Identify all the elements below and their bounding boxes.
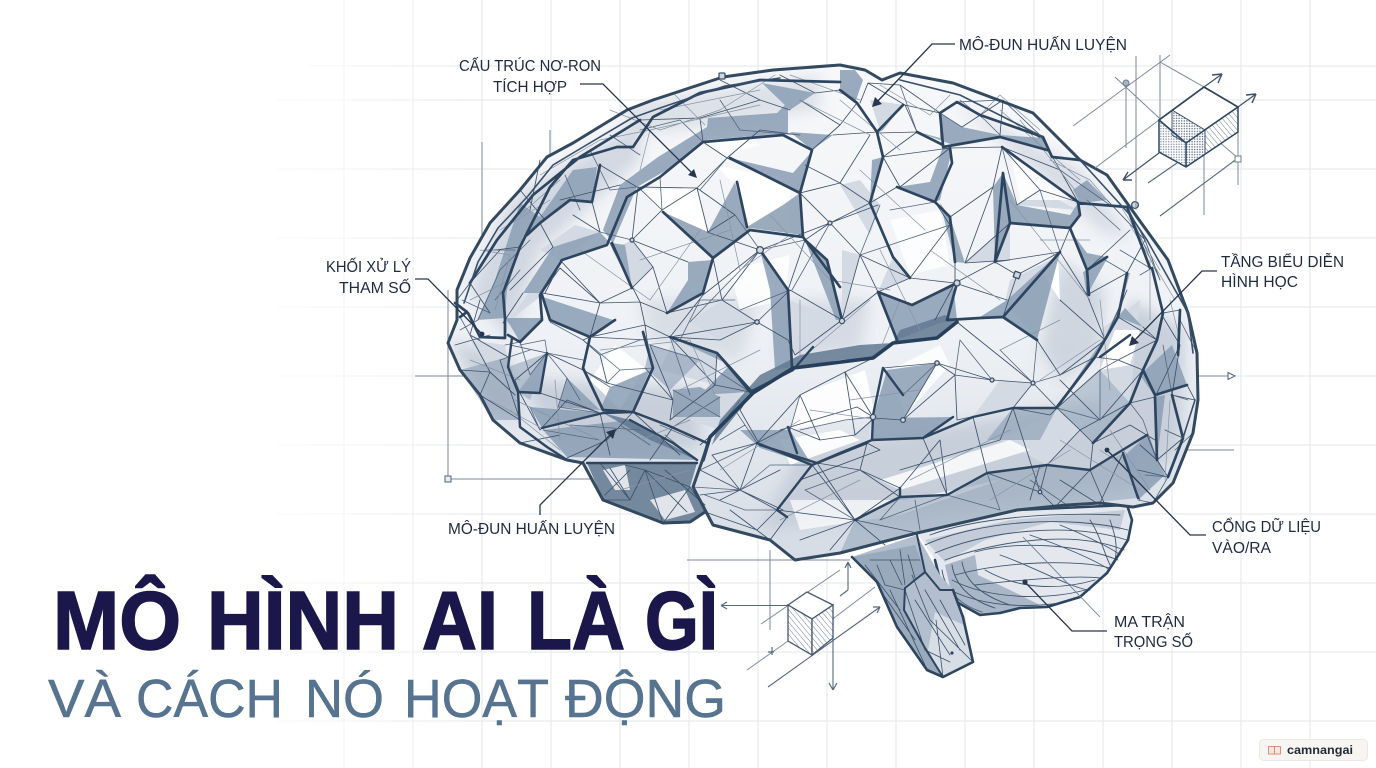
icon: top-right wireframe cube (1073, 55, 1256, 216)
label: parameter block: KHỐI XỬ LÝ (326, 256, 411, 276)
label: parameter block: THAM SỐ (339, 277, 411, 297)
mesh nodes (630, 73, 1138, 494)
title: HÌNH (207, 574, 399, 667)
white facets in underside (603, 465, 695, 520)
sylvian fissure (703, 322, 957, 460)
background grid (276, 0, 1376, 768)
title: GÌ (645, 574, 718, 667)
label: geometric representation layer (1129, 252, 1344, 346)
white highlights (590, 130, 1140, 530)
label: input output port: VÀO/RA (1212, 538, 1271, 557)
icon: book (1268, 746, 1280, 754)
dark underside (587, 315, 957, 523)
subtitle: CÁCH (136, 669, 283, 729)
label: weight matrix: MA TRẬN (1114, 612, 1185, 631)
light mesh (470, 75, 1180, 520)
label: top training module (872, 35, 1127, 107)
label: geometric representation layer: HÌNH HỌC (1221, 272, 1298, 291)
label: neural structure: TÍCH HỢP (493, 77, 567, 96)
cerebellum (917, 505, 1132, 615)
title (53, 574, 718, 667)
light facets (470, 100, 1140, 465)
watermark badge (1260, 740, 1368, 760)
label: neural structure: CẤU TRÚC NƠ-RON (459, 56, 601, 75)
label: neural structure (459, 56, 697, 178)
subtitle: HOẠT (404, 669, 549, 729)
construction lines (415, 130, 1235, 630)
watermark badge: camnangai (1287, 743, 1353, 757)
brainstem (852, 535, 973, 677)
outer contour (448, 65, 1198, 560)
label: lower training module: MÔ-ĐUN HUẤN LUYỆN (448, 519, 615, 538)
label: weight matrix (1022, 537, 1193, 651)
subtitle: NÓ (305, 669, 384, 729)
subtitle (48, 669, 726, 729)
extra mesh (460, 85, 1197, 530)
label: lower training module (448, 429, 616, 538)
label: top training module: MÔ-ĐUN HUẤN LUYỆN (959, 35, 1127, 54)
thin mesh (455, 75, 1195, 550)
label: geometric representation layer: TẦNG BIỂU DIỄN (1221, 252, 1344, 271)
title: LÀ (527, 574, 625, 667)
label: input output port: CỔNG DỮ LIỆU (1212, 516, 1321, 536)
cerebrum (448, 65, 1198, 560)
icon: bottom wireframe cube (721, 562, 880, 690)
label: parameter block (326, 256, 484, 336)
subtitle: VÀ (48, 669, 121, 729)
thick folds (455, 80, 1187, 477)
label: weight matrix: TRỌNG SỐ (1114, 631, 1193, 651)
title: AI (422, 574, 498, 667)
soft shading (450, 75, 1185, 530)
subtitle: ĐỘNG (565, 669, 726, 729)
label: input output port (1105, 448, 1321, 557)
title: MÔ (53, 574, 181, 667)
brain illustration (448, 65, 1198, 677)
shaded fold facets (460, 70, 1187, 553)
